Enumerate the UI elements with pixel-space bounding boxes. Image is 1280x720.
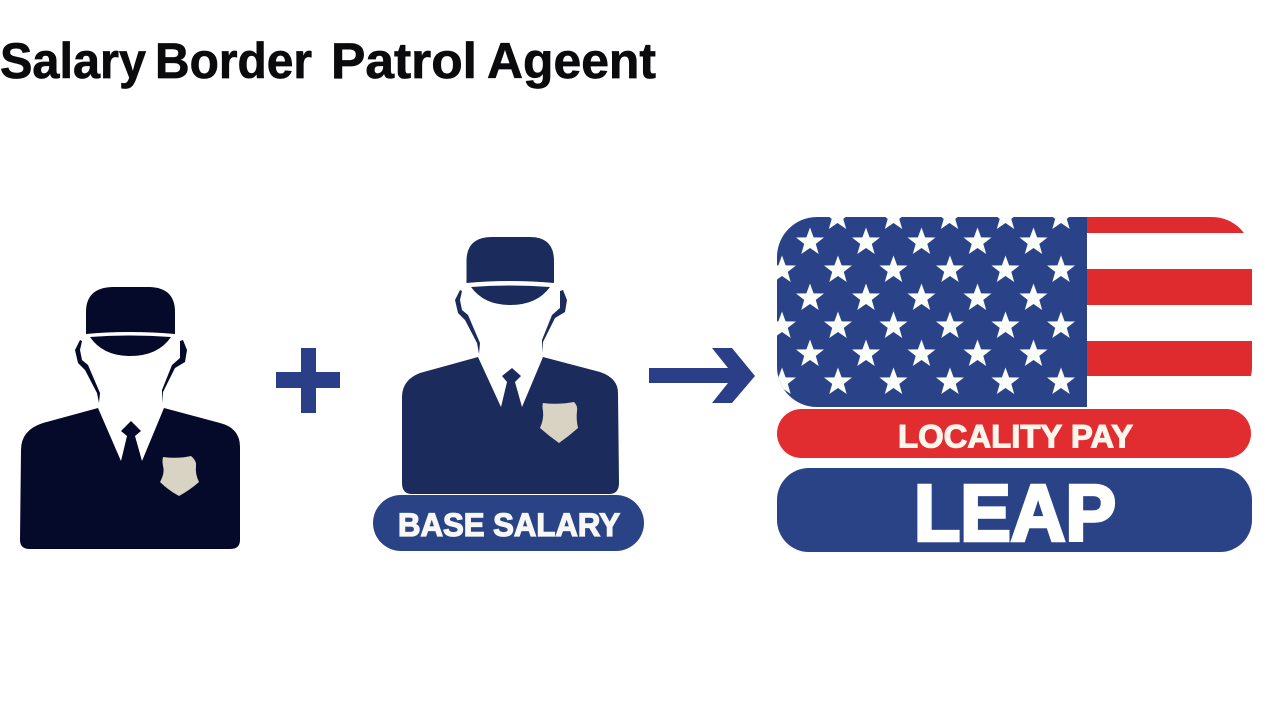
agent torso with tie: [402, 357, 619, 494]
title: Patrol: [331, 33, 477, 89]
locality pay bar: LOCALITY PAY: [898, 418, 1133, 454]
LEAP bar: LEAP: [914, 468, 1116, 558]
title: Border: [155, 33, 312, 89]
locality pay bar: [777, 409, 1251, 458]
icon: American flag: [768, 202, 1252, 407]
agent badge: [540, 402, 578, 443]
agent cap visor: [90, 336, 171, 356]
title: Ageent: [487, 33, 656, 89]
agent neck outline: [75, 340, 187, 403]
base salary label: [373, 495, 644, 551]
icon: agent figure, dark: [20, 287, 240, 549]
agent torso with tie: [20, 408, 240, 549]
agent cap: [466, 237, 554, 283]
agent cap visor: [471, 286, 550, 305]
title: [0, 33, 656, 89]
flag stripes: [1087, 217, 1252, 376]
agent badge: [160, 456, 199, 496]
icon: agent figure, base salary: [402, 237, 619, 494]
agent neck outline: [455, 290, 567, 354]
flag canton with stars: [768, 202, 1087, 407]
title: Salary: [0, 33, 146, 89]
arrow: [649, 348, 755, 403]
LEAP bar: [777, 468, 1252, 558]
base salary label: BASE SALARY: [398, 507, 620, 543]
agent cap: [86, 287, 175, 334]
plus sign: [276, 348, 340, 413]
